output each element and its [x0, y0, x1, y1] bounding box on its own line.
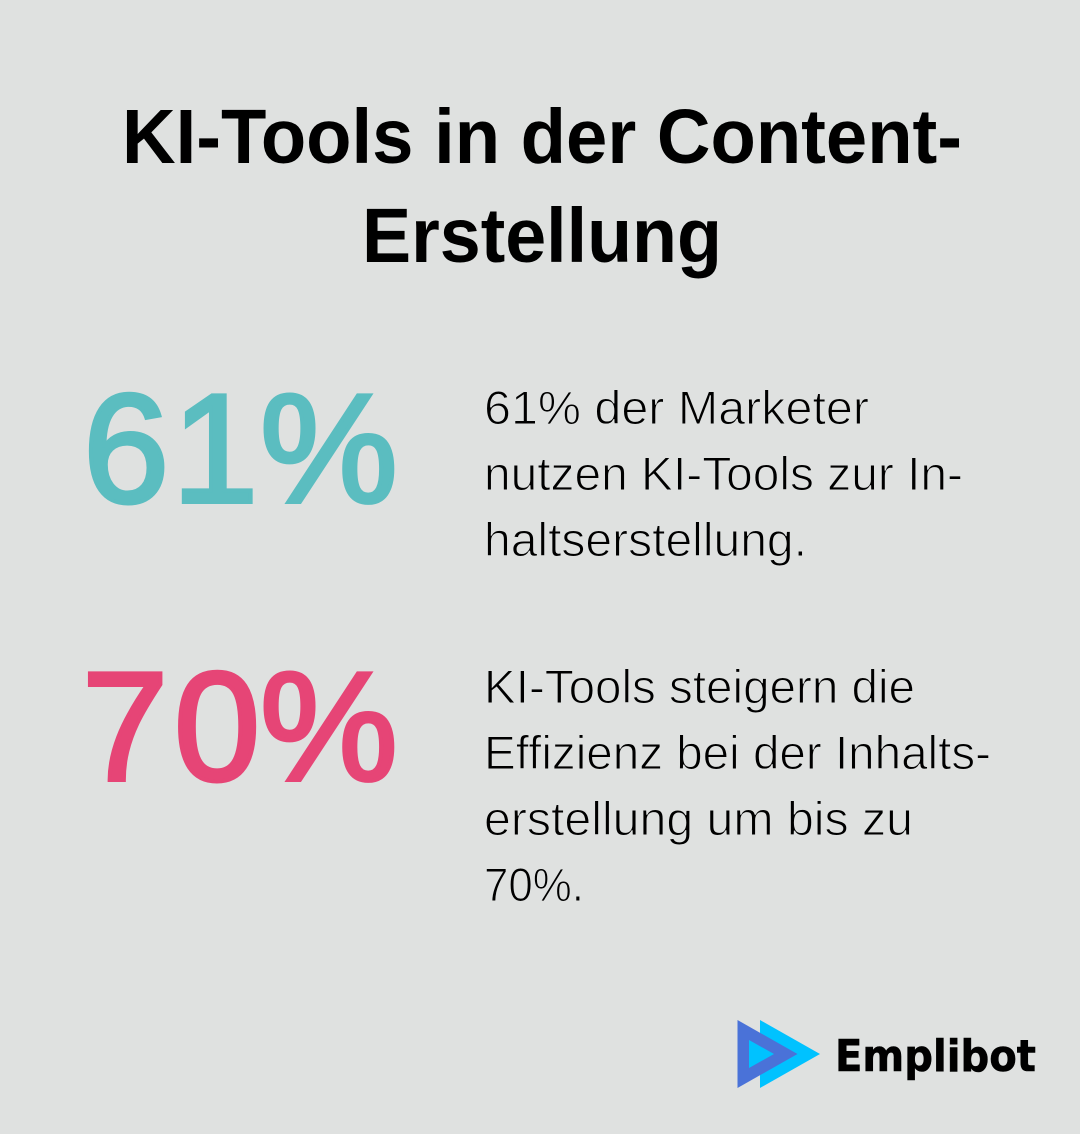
text block: 61% description: haltserstellung.: [484, 513, 807, 566]
icon: play triangles: [738, 1020, 820, 1088]
stat: 61%: 61%: [83, 362, 398, 535]
logo: Emplibot: [738, 1020, 1036, 1088]
text block: 61% description: 61% der Marketer: [484, 381, 869, 434]
text block: 61% description: [484, 381, 963, 566]
text block: 70% description: Effizienz bei der Inhalts-: [484, 726, 991, 779]
title: Erstellung: [362, 193, 722, 279]
text block: 61% description: nutzen KI-Tools zur In-: [484, 447, 963, 500]
title: KI-Tools in der Content-: [122, 94, 962, 180]
text block: 70% description: 70%.: [484, 858, 584, 911]
text block: 70% description: [484, 660, 991, 911]
stat: 70%: 70%: [82, 640, 398, 813]
text block: 70% description: erstellung um bis zu: [484, 792, 913, 845]
title: [122, 94, 962, 279]
wordmark: Emplibot: [835, 1031, 1036, 1082]
text block: 70% description: KI-Tools steigern die: [484, 660, 915, 713]
